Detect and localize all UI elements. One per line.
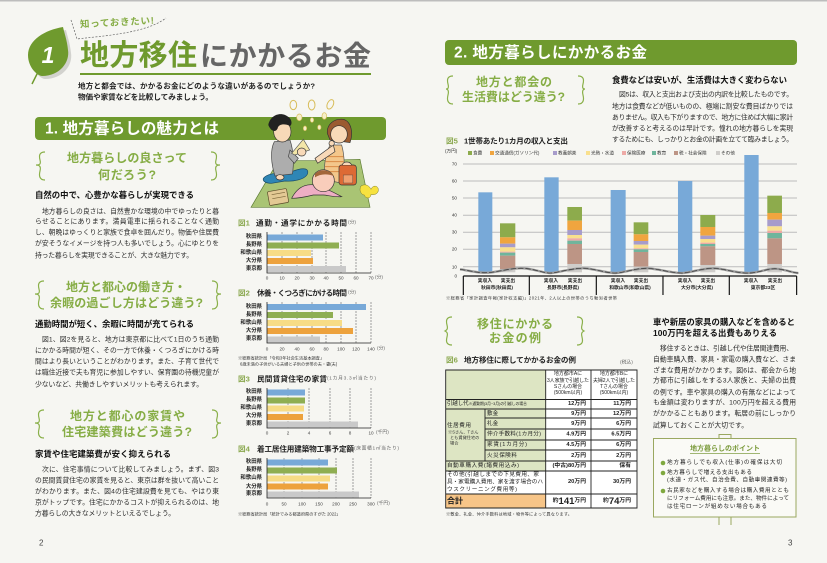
- chart: 図4 construction cost: 0: [266, 502, 269, 506]
- body text 5: 自動車購入費、家具・家電の購入費など、さま: [653, 354, 796, 364]
- chart: 図5 income and expenditure: 大分市(大分県): [681, 284, 713, 291]
- illustration: family picnic: [251, 99, 378, 207]
- title: にかかるお金: [200, 40, 371, 72]
- table: 図6 moving costs: (500km以内): [600, 389, 629, 396]
- body text 2: 少ないなど、共働きしやすいメリットも考えられます。: [35, 380, 203, 388]
- legend: 税・社会保険: [679, 150, 707, 156]
- heading: 生活費: 生活費はどう違う?: [462, 89, 565, 104]
- heading: 働き方: 地方と都心の働き方・: [66, 279, 186, 294]
- table: 図6 moving costs: その他(引越しまでの下見費用、家: [447, 470, 539, 478]
- chart: 図1 commute time: [238, 218, 383, 280]
- chart: 図2 relaxation time: [238, 288, 385, 368]
- heading: 移住にかかるお金の例: [445, 316, 584, 345]
- chart: 図2 relaxation time: 秋田県: [246, 302, 263, 310]
- chart: 図3 rent: 和歌山県: [240, 403, 263, 411]
- chart: 図2 relaxation time: 0: [266, 346, 269, 352]
- chart: 図1 commute time: 0: [266, 276, 269, 280]
- table: 図6 moving costs: 敷金: [487, 409, 499, 417]
- body text 4: が改善すると考えるのは早計です。憧れの地方暮らしを実現: [612, 124, 793, 132]
- chart: 図2 relaxation time: 休養・くつろぎにかける時間: [257, 288, 347, 298]
- legend: 光熱・水道: [591, 150, 614, 156]
- chart: 図2 relaxation time: 和歌山県: [240, 318, 263, 326]
- chart: 図4 construction cost: 秋田県: [246, 457, 263, 465]
- chart: 図1 commute time: 10: [279, 276, 285, 280]
- body text 2: [35, 334, 219, 388]
- body text 2: 間はより長いということがわかります。また、子育て世代で: [35, 356, 219, 366]
- body text 1: らせることにあります。満員電車に揺られることなく通勤: [35, 216, 219, 226]
- body text 4: ありません。収入も下がりますので、地方に住めば大幅に家計: [612, 112, 793, 122]
- chart: 図5 income and expenditure: 実収入: [478, 277, 492, 284]
- chart: 図4 construction cost: 長野県: [246, 465, 263, 473]
- chart: 図4 construction cost: 50: [281, 502, 287, 506]
- table: 図6 moving costs: [446, 354, 637, 518]
- panel: points signboard: は住宅ローンが組めない場合もある: [667, 502, 767, 510]
- intro text: [78, 80, 315, 102]
- chart: 図5 income and expenditure: 秋田市(秋田県): [481, 284, 513, 291]
- subheading: 通勤時間が短く、余暇に時間が充てられる: [35, 319, 194, 329]
- body text 1: が安そうなイメージを持つ人も多いでしょう。心にゆとりを: [35, 238, 219, 248]
- title: 地方移住: [80, 39, 197, 72]
- subheading: 家賃や住宅建築費が安く抑えられる: [35, 449, 171, 459]
- chart: 図5 income and expenditure: 20: [452, 246, 457, 252]
- chart: 図4 construction cost: 200: [332, 502, 340, 506]
- body text 3: 方暮らしの大きなメリットといえるでしょう。: [35, 508, 175, 518]
- chart: 図4 construction cost: 100: [298, 502, 306, 506]
- table: 図6 moving costs: 30万円: [613, 478, 631, 485]
- chart: 図2 relaxation time: 120: [352, 346, 360, 352]
- table: 図6 moving costs: 地方移住に際してかかるお金の例: [464, 354, 576, 364]
- heading: 地方暮らしの良さって: 地方暮らしの良さって: [67, 150, 187, 165]
- body text 3: [35, 464, 219, 518]
- table: 図6 moving costs: ウスクリーニング費用等): [447, 485, 517, 493]
- subheading: 食費などは安いが、生活費は大きく変わらない: [612, 75, 787, 85]
- table: 図6 moving costs: 6.5万円: [611, 430, 631, 438]
- axis break wave: [460, 268, 798, 276]
- tagline: 知っておきたい: 知っておきたい!: [80, 15, 154, 30]
- panel: points signboard: 地方暮らしのポイント: [690, 444, 760, 452]
- chart: 図5 income and expenditure: 40: [452, 212, 457, 218]
- body text 1: [35, 206, 219, 260]
- body text 1: し、朝晩はゆっくりと家族で食卓を囲んだり。物価や住居費: [35, 228, 219, 236]
- table: 図6 moving costs: 4.5万円: [566, 441, 586, 448]
- heading: 家賃: 住宅建築費はどう違う?: [62, 424, 192, 439]
- legend: 交通通信(ガソリン代): [495, 150, 540, 156]
- subheading: [653, 317, 795, 338]
- section bar: 1. 地方暮らしの魅力とは: 1. 地方暮らしの魅力とは: [45, 118, 219, 138]
- chart: 図4 construction cost: 250: [349, 502, 357, 506]
- subheading: 車や新居の家具の購入などを含めると: [653, 317, 795, 327]
- chart: 図4 construction cost: 300: [367, 502, 375, 506]
- legend: [468, 150, 735, 156]
- heading: 働き方: 余暇の過ごし方はどう違う?: [50, 295, 203, 310]
- chart: 図2 relaxation time: 6歳未満の子供がいる夫婦と子供の世帯の夫・妻(夫): [240, 360, 338, 368]
- chart: 図3 rent: 長野県: [246, 395, 263, 403]
- chart: 図1 commute time: 70: [368, 276, 374, 280]
- chart: 図1 commute time: 40: [323, 276, 329, 280]
- table: 図6 moving costs: 12万円: [568, 400, 586, 407]
- chart: 図2 relaxation time: 大分県: [246, 326, 263, 334]
- table: 図6 moving costs: 9万円: [571, 420, 586, 427]
- body text 1: 地方暮らしの良さは、自然豊かな環境の中でゆったりと暮: [42, 206, 219, 216]
- chart: 図5 income and expenditure: 70: [452, 162, 457, 166]
- heading: 移住にかかるお金の例: お金の例: [489, 330, 541, 345]
- table: 図6 moving costs: 9万円: [571, 410, 586, 417]
- table: 図6 moving costs: 合計: [447, 496, 463, 506]
- body text 3: 京がトップです。住宅にかかるコストが抑えられるのは、地: [35, 498, 219, 506]
- panel: points signboard: [654, 434, 796, 525]
- chart: 図3 rent: (1カ月3.3㎡当たり): [327, 374, 376, 382]
- legend: その他: [721, 150, 735, 156]
- heading: 移住にかかるお金の例: 移住にかかる: [477, 316, 553, 331]
- chart: 図5 income and expenditure: 長野市(長野県): [547, 284, 579, 291]
- chart: 図3 rent: 民間賃貸住宅の家賃: [257, 374, 327, 384]
- chart: 図4 construction cost: [238, 444, 399, 518]
- panel: points signboard: 地方暮らしで増える支出もある: [667, 468, 752, 476]
- chart: 図1 commute time: 長野県: [246, 240, 263, 248]
- table: 図6 moving costs: 6万円: [616, 441, 631, 448]
- chart: 図5 income and expenditure: 実収入: [611, 277, 625, 284]
- chart: 図3 rent: 6: [329, 430, 332, 436]
- body text 5: ざまな費用がかかります。図6は、都会から地: [653, 366, 796, 374]
- chart: 図5 income and expenditure: 実支出: [768, 277, 782, 284]
- heading: 家賃: 地方と都心の家賃や: [70, 408, 185, 423]
- table: 図6 moving costs: (500km以内): [554, 389, 583, 396]
- chart: 図2 relaxation time: (分): [377, 344, 385, 352]
- chart: 図4 construction cost: 図4: [238, 444, 251, 454]
- chart: 図2 relaxation time: 20: [279, 346, 285, 352]
- chart: 図2 relaxation time: 80: [323, 346, 329, 352]
- chart: 図5 income and expenditure: 実支出: [501, 277, 515, 284]
- table: 図6 moving costs: 2万円: [571, 452, 586, 459]
- chart: 図3 rent: 2: [287, 430, 290, 436]
- chart: 図1 commute time: 50: [338, 276, 344, 280]
- chart: 図2 relaxation time: 東京都: [246, 334, 263, 342]
- tagline: 知っておきたい: [71, 15, 166, 39]
- table: 図6 moving costs: 4.9万円: [566, 430, 586, 438]
- table: 図6 moving costs: 具・家電購入費用、家を渡す場合のハ: [447, 478, 543, 486]
- panel: points signboard: (水道・ガス代、自治会費、自動車関連費等): [667, 476, 787, 484]
- table: 図6 moving costs: 引越し代※通繁期(3月~3月)の引越しの場合: [447, 399, 527, 407]
- chart: 図5 income and expenditure: (万円): [445, 148, 458, 154]
- chart: 図5 income and expenditure: [445, 136, 798, 302]
- table: 図6 moving costs: (税込): [620, 358, 633, 366]
- chart: 図2 relaxation time: 100: [337, 346, 345, 352]
- subheading: 100万円を超える出費もありえる: [653, 328, 777, 338]
- heading: 生活費: 地方と都会の: [476, 74, 552, 89]
- icon: leaf with number 1: 1: [42, 42, 54, 68]
- section bar: 2. 地方暮らしにかかるお金: 2. 地方暮らしにかかるお金: [454, 42, 647, 62]
- table: 図6 moving costs: 6万円: [616, 420, 631, 427]
- table: 図6 moving costs: ※Sさん、Tさん: [448, 428, 478, 436]
- body text 5: 移住するときは、引越し代や住居関連費用、: [660, 344, 793, 352]
- chart: 図1 commute time: 東京都: [246, 264, 263, 272]
- chart: 図1 commute time: 30: [309, 276, 315, 280]
- table: 図6 moving costs: 家賃(1カ月分): [487, 440, 527, 448]
- chart: 図3 rent: 図3: [238, 374, 250, 384]
- body text 3: がわかります。また、図4の住宅建設費を見ても、やはり東: [35, 486, 219, 496]
- table: 図6 moving costs: 図6: [446, 356, 458, 364]
- chart: 図5 income and expenditure: 実支出: [634, 277, 648, 284]
- body text 2: は職住近接で夫も育児に参加しやすい、保育園の待機児童が: [35, 368, 219, 376]
- table: 図6 moving costs: 2万円: [616, 452, 631, 459]
- table: 図6 moving costs: 3人家族で引越した: [547, 377, 589, 384]
- chart: 図3 rent: 10: [368, 430, 374, 436]
- table: 図6 moving costs: 11万円: [613, 400, 631, 407]
- chart: 図5 income and expenditure: 実支出: [701, 277, 715, 284]
- chart: 図5 income and expenditure: 和歌山市(和歌山県): [609, 284, 651, 291]
- table: 図6 moving costs: 場合: [450, 440, 459, 446]
- intro text: 地方と都会では、かかるお金にどのような違いがあるのでしょうか?: [78, 80, 315, 90]
- chart: 図1 commute time: 大分県: [246, 256, 263, 264]
- chart: 図5 income and expenditure: 1世帯あたり1カ月の収入と支出: [464, 136, 568, 146]
- body text 4: [612, 90, 793, 144]
- body text 3: 次に、住宅事情について比較してみましょう。まず、図3: [42, 464, 219, 474]
- panel: points signboard: にリフォーム費用にも注意。また、物件によって: [667, 494, 789, 502]
- chart: 図1 commute time: (分): [348, 218, 356, 226]
- chart: 図2 relaxation time: (分): [348, 288, 356, 296]
- legend: 保険医療: [627, 150, 646, 156]
- chart: 図4 construction cost: 東京都: [246, 489, 263, 497]
- bars: [460, 155, 798, 295]
- table: 図6 moving costs: 約74万円: [603, 496, 631, 506]
- table: 図6 moving costs: (中古)80万円: [552, 461, 586, 469]
- section bar: 1. 地方暮らしの魅力とは: [35, 117, 386, 140]
- chart: 図3 rent: (千円): [376, 428, 389, 436]
- table: 図6 moving costs: 火災保険料: [487, 451, 517, 459]
- legend: 教養娯楽: [558, 150, 577, 156]
- intro text: 物価や家賃などを比較してみましょう。: [78, 92, 213, 102]
- body text 5: [653, 344, 796, 430]
- chart: 図1 commute time: 和歌山県: [240, 248, 263, 256]
- chart: 図5 income and expenditure: 0: [454, 274, 457, 278]
- chart: 図3 rent: 0: [266, 430, 269, 436]
- chart: 図2 relaxation time: 図2: [238, 288, 250, 298]
- body text 5: 方都市に引越しをする3人家族と、夫婦の出費: [653, 376, 796, 384]
- table: 図6 moving costs: 地方都市Aに: [554, 370, 582, 377]
- chart: 図1 commute time: 秋田県: [246, 232, 263, 240]
- chart: 図4 construction cost: (床面積1㎡当たり): [354, 444, 399, 452]
- body text 5: の例です。車や家具の購入の有無などによって: [653, 388, 796, 396]
- heading: 働き方: [35, 279, 221, 310]
- legend: 食費: [473, 150, 483, 156]
- subheading: 自然の中で、心豊かな暮らしが実現できる: [35, 190, 194, 200]
- body text 2: 図1、図2を見ると、地方は東京都に比べて1日のうち通勤: [42, 334, 219, 344]
- table: 図6 moving costs: 自動車購入費(諸費用込み): [447, 461, 519, 469]
- chart: 図5 income and expenditure: 図5: [446, 136, 459, 146]
- chart: 図5 income and expenditure: 10: [452, 264, 457, 270]
- chart: 図1 commute time: 図1: [238, 218, 251, 228]
- body text 5: 試算しておくことが大切です。: [653, 420, 748, 430]
- chart: 図3 rent: 8: [349, 430, 352, 436]
- table: 図6 moving costs: 住居費用: [447, 421, 471, 429]
- heading: 地方暮らしの良さって: [36, 150, 220, 182]
- chart: 図2 relaxation time: 140: [367, 346, 375, 352]
- chart: 図5 income and expenditure: 実収入: [744, 277, 758, 284]
- body text 3: の民間賃貸住宅の家賃を見ると、東京は群を抜いて高いこと: [35, 476, 219, 484]
- chart: 図1 commute time: 通勤・通学にかかる時間: [256, 218, 347, 228]
- chart: 図3 rent: 4: [308, 430, 311, 436]
- chart: 図2 relaxation time: 60: [309, 346, 315, 352]
- table: 図6 moving costs: 夫婦2人で引越した: [593, 377, 635, 384]
- table: 図6 moving costs: Sさんの場合: [554, 383, 582, 390]
- chart: 図3 rent: [238, 374, 389, 436]
- table: 図6 moving costs: 約141万円: [553, 496, 586, 506]
- chart: 図1 commute time: (分): [375, 274, 383, 280]
- page number 3: 3: [788, 538, 793, 548]
- chart: 図4 construction cost: 150: [315, 502, 323, 506]
- table: 図6 moving costs: Tさんの場合: [600, 383, 628, 390]
- chart: 図5 income and expenditure: 東京都23区: [751, 284, 775, 291]
- panel: points signboard: 古民家などを購入する場合は購入費用ととも: [667, 486, 789, 494]
- heading: 家賃: [35, 408, 221, 439]
- table: 図6 moving costs: 12万円: [613, 410, 631, 417]
- panel: points signboard: 地方暮らしでも収入(仕事)の確保は大切: [667, 458, 782, 466]
- heading: 生活費: [446, 74, 585, 104]
- chart: 図5 income and expenditure: 60: [452, 178, 457, 184]
- body text 4: するためにも、しっかりとお金の計画を立てて臨みましょう。: [612, 134, 793, 144]
- chart: 図2 relaxation time: 40: [294, 346, 300, 352]
- chart: 図4 construction cost: 着工居住用建築物工事予定額: [257, 444, 354, 454]
- heading: 地方暮らしの良さって: 何だろう?: [98, 167, 156, 182]
- chart: 図4 construction cost: (千円): [377, 500, 390, 506]
- table: 図6 moving costs: とも賃貸住宅の: [450, 434, 479, 441]
- table: 図6 moving costs: 礼金: [487, 419, 499, 427]
- chart: 図5 income and expenditure: 50: [452, 196, 457, 200]
- chart: 図1 commute time: 20: [294, 276, 300, 280]
- chart: 図2 relaxation time: ※総務省統計局「令和3年社会生活基本調査」: [238, 354, 324, 362]
- chart: 図4 construction cost: 和歌山県: [240, 473, 263, 481]
- chart: 図5 income and expenditure: 実支出: [568, 277, 582, 284]
- body text 4: 地方は食費などが低いものの、極端に割安な費目ばかりでは: [612, 102, 793, 110]
- chart: 図5 income and expenditure: ※総務省「家計調査年報(家計収支編)」2021年、2人以上の世帯のうち勤労者世帯: [446, 294, 617, 302]
- chart: 図5 income and expenditure: 実収入: [544, 277, 558, 284]
- table: 図6 moving costs: 保有: [619, 461, 631, 469]
- chart: 図3 rent: 東京都: [246, 419, 263, 427]
- body text 2: にかかる時間が短く、その一方で休養・くつろぎにかける時: [35, 346, 219, 354]
- body text 5: がかかることもあります。転居の前にしっかり: [653, 408, 796, 418]
- chart: 図4 construction cost: ※総務省統計局「統計でみる都道府県のすがた 2022」: [238, 510, 341, 518]
- body text 5: も金額は変わりますが、100万円を超える費用: [653, 398, 796, 406]
- section bar: 2. 地方暮らしにかかるお金: [445, 40, 797, 65]
- chart: 図3 rent: 秋田県: [246, 387, 263, 395]
- table: 図6 moving costs: 20万円: [568, 478, 586, 485]
- chart: 図5 income and expenditure: 30: [452, 230, 457, 234]
- icon: leaf with number 1: [28, 27, 71, 84]
- table: 図6 moving costs: 地方都市Bに: [600, 370, 628, 377]
- chart: 図2 relaxation time: 長野県: [246, 310, 263, 318]
- legend: 教育: [657, 150, 667, 156]
- table: 図6 moving costs: 仲介手数料(1カ月分): [487, 430, 541, 438]
- page number 2: 2: [39, 538, 44, 548]
- chart: 図3 rent: 大分県: [246, 411, 263, 419]
- chart: 図5 income and expenditure: 実収入: [678, 277, 692, 284]
- body text 4: 図5は、収入と支出および支出の内訳を比較したものです。: [619, 90, 793, 98]
- body text 1: 持った暮らしを実現できることが、大きな魅力です。: [35, 250, 193, 260]
- table: 図6 moving costs: ※敷金、礼金、仲介手数料は地域・物件等によって異なります。: [446, 510, 572, 518]
- chart: 図4 construction cost: 大分県: [246, 482, 263, 490]
- chart: 図1 commute time: 60: [353, 276, 359, 280]
- title: [80, 39, 371, 75]
